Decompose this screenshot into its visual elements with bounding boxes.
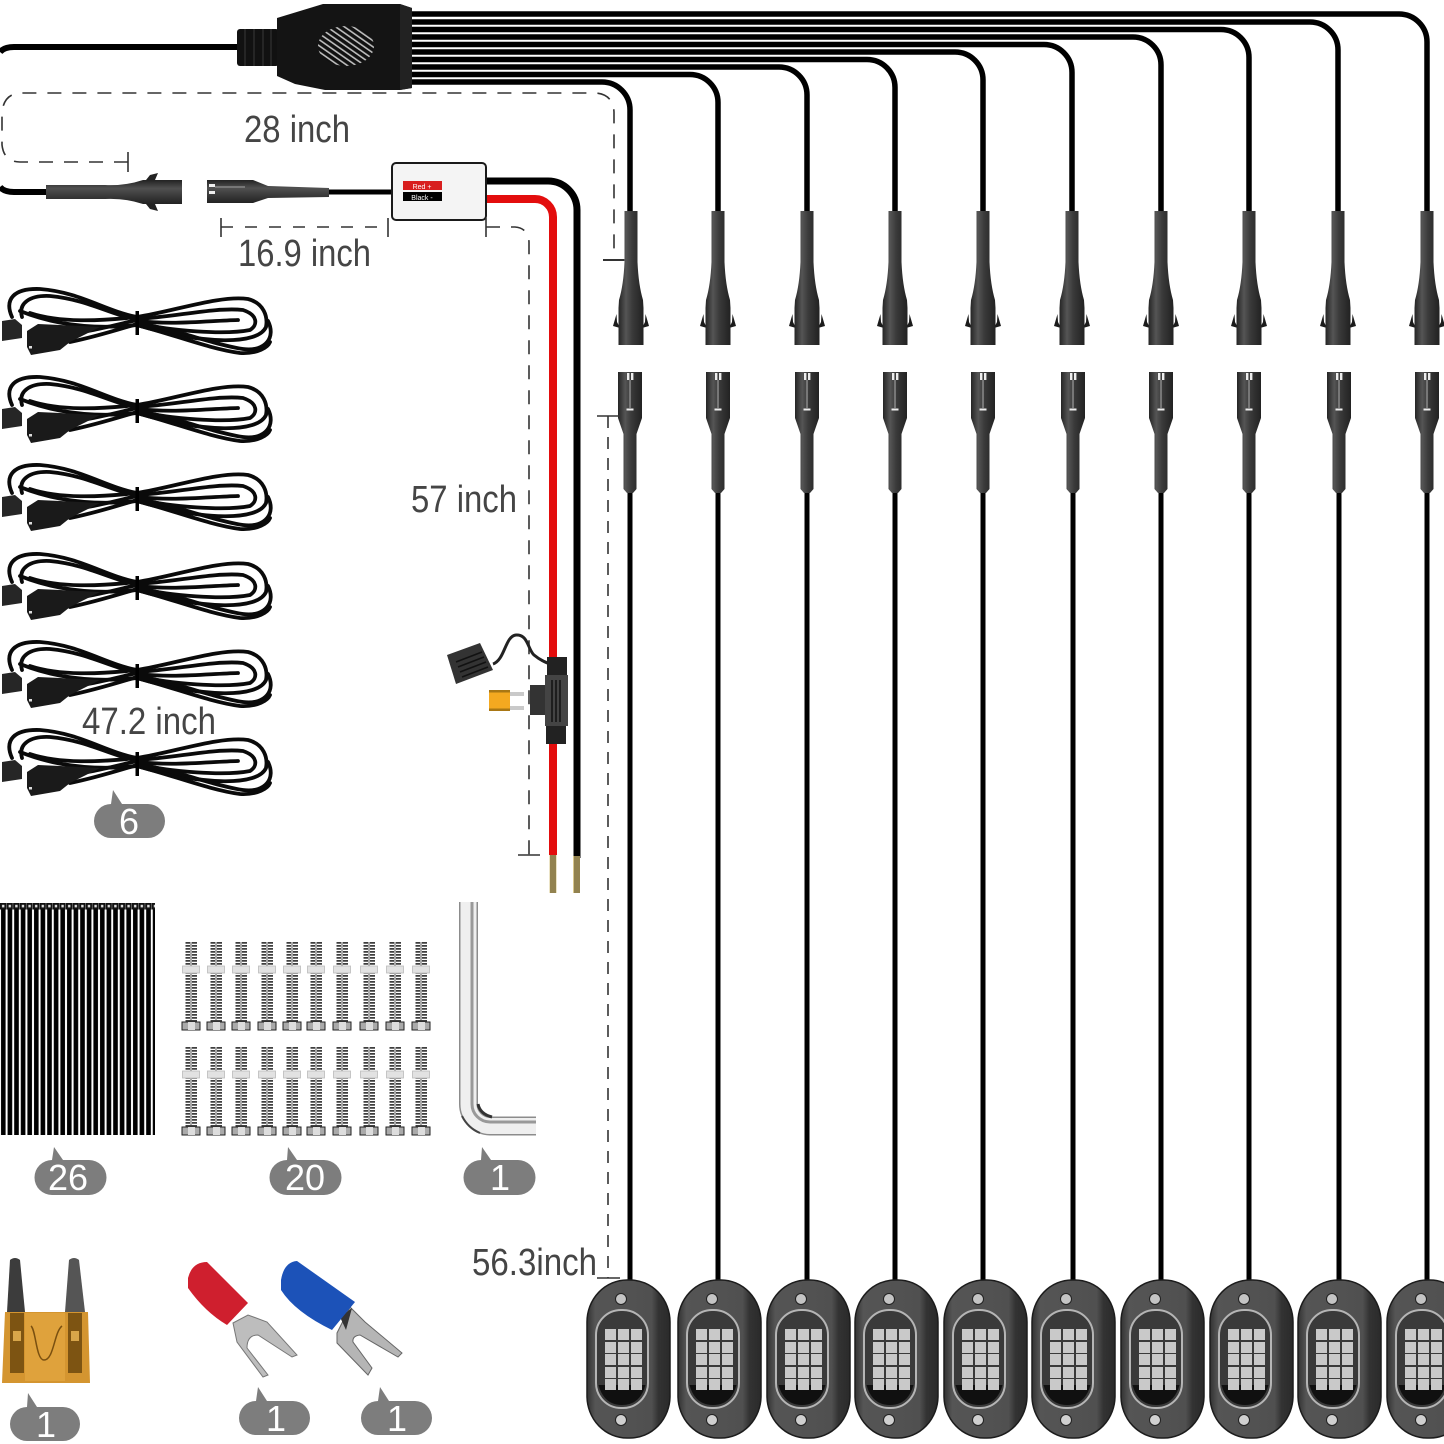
label: 56.3inch: 56.3inch <box>472 1242 597 1284</box>
ten output wires from hub <box>412 14 1427 212</box>
LED rock light pods <box>587 1280 1444 1438</box>
cable ties <box>0 903 155 1135</box>
blue fork terminal <box>281 1261 402 1375</box>
dashed dimension: 56.3 inch <box>597 416 620 1278</box>
female connectors row <box>618 372 1439 493</box>
count badge: 6 <box>94 790 165 842</box>
label: 57 inch: 57 inch <box>411 479 517 521</box>
small orange fuse <box>489 690 524 711</box>
label: 47.2 inch: 47.2 inch <box>82 701 216 743</box>
controller box with red and black leads: Black - <box>411 195 433 202</box>
screws, upper row <box>182 942 430 1030</box>
dashed dimension: 57 inch <box>486 218 540 855</box>
dashed dimension: 16.9 inch <box>221 218 388 237</box>
controller box with red and black leads <box>392 163 577 858</box>
input wire, upper left <box>0 47 240 52</box>
screws, lower row <box>182 1047 430 1135</box>
count badge: 1 (red terminal) <box>239 1387 310 1439</box>
male connectors row <box>613 211 1444 345</box>
red fork terminal <box>188 1262 297 1377</box>
count badge: 1 (fuse) <box>10 1393 80 1444</box>
lower wires to pods <box>630 490 1427 1285</box>
count badge: 20 <box>270 1147 342 1198</box>
count badge: 20: 20 <box>285 1157 325 1198</box>
count badge: 6: 6 <box>119 801 139 842</box>
tick on first male connector <box>603 259 624 261</box>
count badge: 1 (blue terminal) <box>361 1387 432 1439</box>
inline fuse holder <box>447 635 568 744</box>
controller box with red and black leads: Red + <box>413 184 431 191</box>
allen key <box>462 902 536 1133</box>
label: 28 inch: 28 inch <box>244 109 350 151</box>
dashed dimension: 28 inch <box>2 93 625 260</box>
count badge: 1 (allen key) <box>464 1147 536 1198</box>
count badge: 1 (fuse): 1 <box>36 1404 56 1444</box>
extension cable coils <box>2 289 271 796</box>
count badge: 1 (allen key): 1 <box>490 1157 510 1198</box>
stripped wire tips <box>550 855 580 893</box>
count badge: 1 (blue terminal): 1 <box>387 1398 407 1439</box>
label: 16.9 inch: 16.9 inch <box>238 233 371 275</box>
large amber fuse <box>2 1258 90 1383</box>
count badge: 1 (red terminal): 1 <box>266 1398 286 1439</box>
male splice connector and wire <box>0 173 182 211</box>
count badge: 26 <box>34 1147 106 1198</box>
count badge: 26: 26 <box>48 1157 88 1198</box>
hub connector <box>237 4 412 90</box>
female splice connector and wire <box>207 180 395 203</box>
